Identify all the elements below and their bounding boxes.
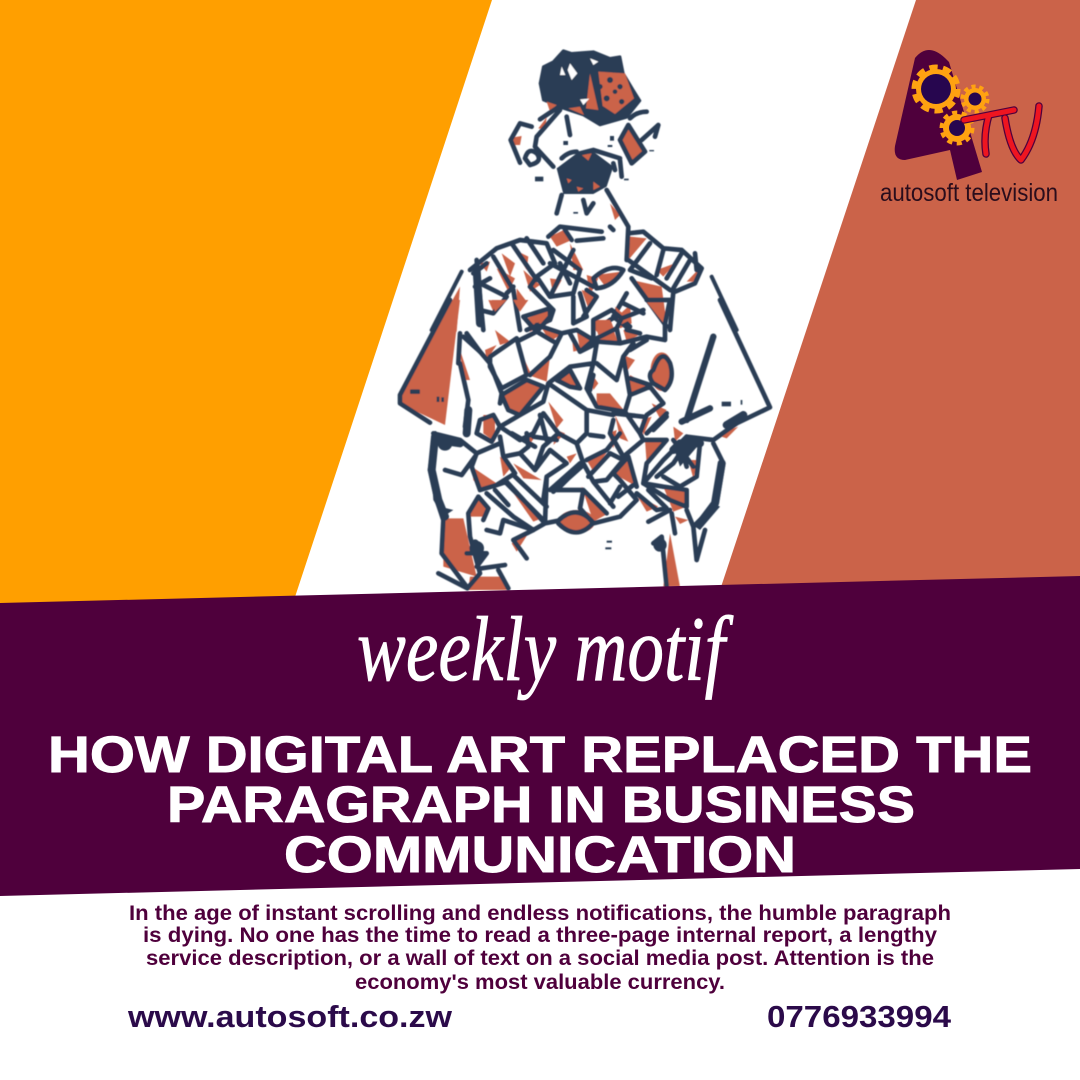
title: HOW DIGITAL ART REPLACED THE <box>48 726 1032 783</box>
figure upper body: head and shoulders <box>432 51 737 332</box>
figure lower body: torso mosaic, arms and legs <box>400 300 770 590</box>
text block: intro paragraph: economy's most valuable currency. <box>355 971 725 994</box>
text block: intro paragraph: is dying. No one has the time to read a three-page internal report, a lengthy <box>143 924 937 947</box>
logo: purple figure-four shape <box>895 50 982 180</box>
panel: orange background slant <box>0 0 492 603</box>
title <box>48 726 1032 883</box>
logo: small gear <box>942 113 972 143</box>
illustration: mosaic figure <box>400 51 770 590</box>
logo: large gear <box>915 68 957 110</box>
contact: phone number: 0776933994 <box>767 999 952 1034</box>
title: PARAGRAPH IN BUSINESS <box>167 776 915 833</box>
heading: script motif label: weekly motif <box>357 598 734 700</box>
icon: autosoft television logo <box>880 50 1058 207</box>
logo: medium gear <box>963 87 987 111</box>
logo: red TV lettering <box>964 106 1039 160</box>
text block: intro paragraph: In the age of instant scrolling and endless notifications, the humble paragraph <box>129 902 951 925</box>
text block: intro paragraph: service description, or a wall of text on a social media post. Attention is the <box>146 947 934 970</box>
text block: intro paragraph <box>129 902 951 994</box>
logo: wordmark: autosoft television <box>880 179 1058 207</box>
title: COMMUNICATION <box>284 826 796 883</box>
panel: terracotta background slant <box>720 0 1080 590</box>
panel: purple title band <box>0 576 1080 896</box>
contact: website: www.autosoft.co.zw <box>127 999 453 1034</box>
